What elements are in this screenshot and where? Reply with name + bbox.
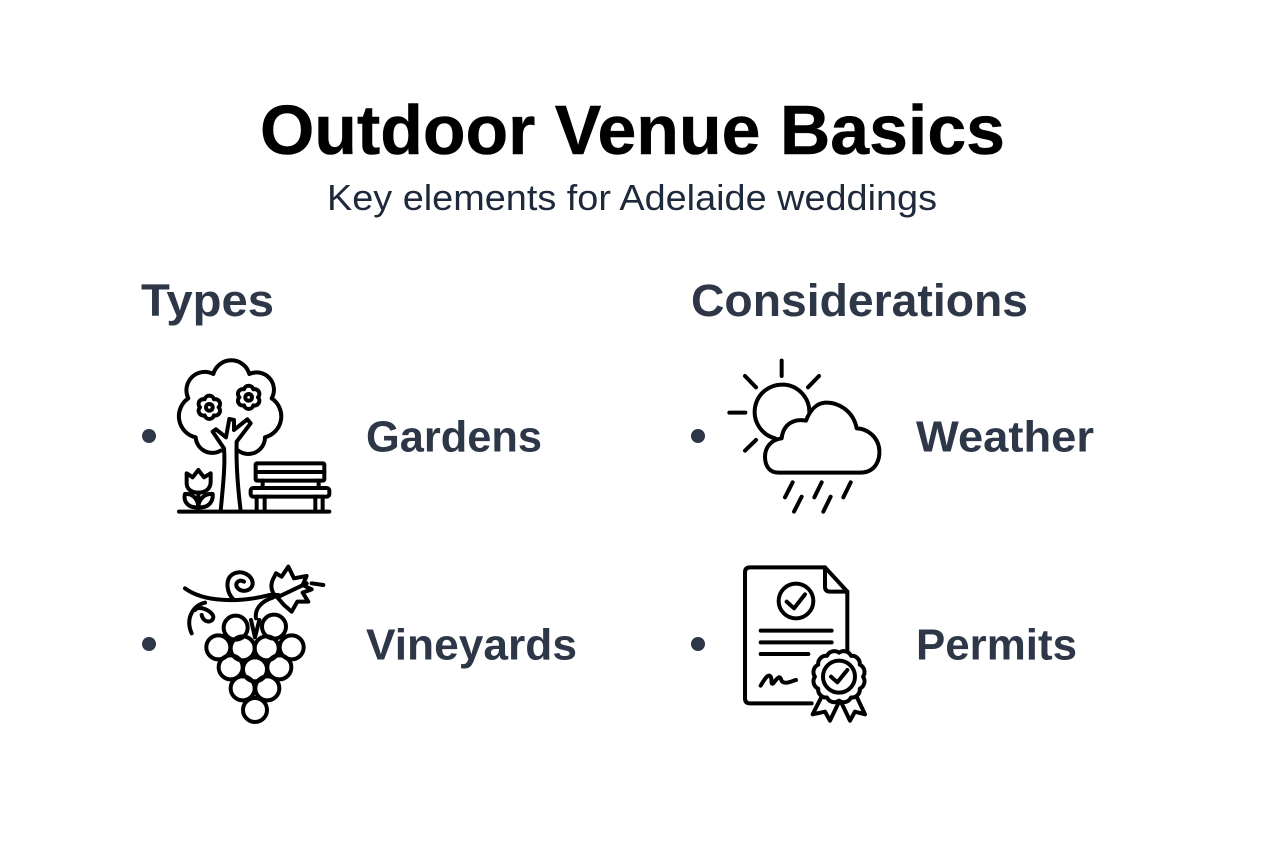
label: weather: Weather (916, 412, 1094, 462)
subtitle: Key elements for Adelaide weddings (327, 177, 937, 218)
panel: considerations (691, 275, 1094, 721)
bullet: gardens (142, 429, 156, 443)
icon: tree, flower and bench (179, 360, 329, 512)
panel: types (141, 275, 577, 722)
title: Outdoor Venue Basics (260, 91, 1005, 169)
bullet: vineyards (142, 637, 156, 651)
icon: sun, cloud and rain (729, 361, 879, 512)
label: vineyards: Vineyards (366, 620, 577, 670)
label: gardens: Gardens (366, 412, 542, 462)
bullet: weather (691, 429, 705, 443)
heading: considerations: Considerations (691, 275, 1028, 326)
icon: grapes on vine (185, 567, 323, 722)
icon: certificate document with rosette (745, 567, 865, 721)
label: permits: Permits (916, 620, 1077, 670)
heading: types: Types (141, 275, 274, 326)
bullet: permits (691, 637, 705, 651)
